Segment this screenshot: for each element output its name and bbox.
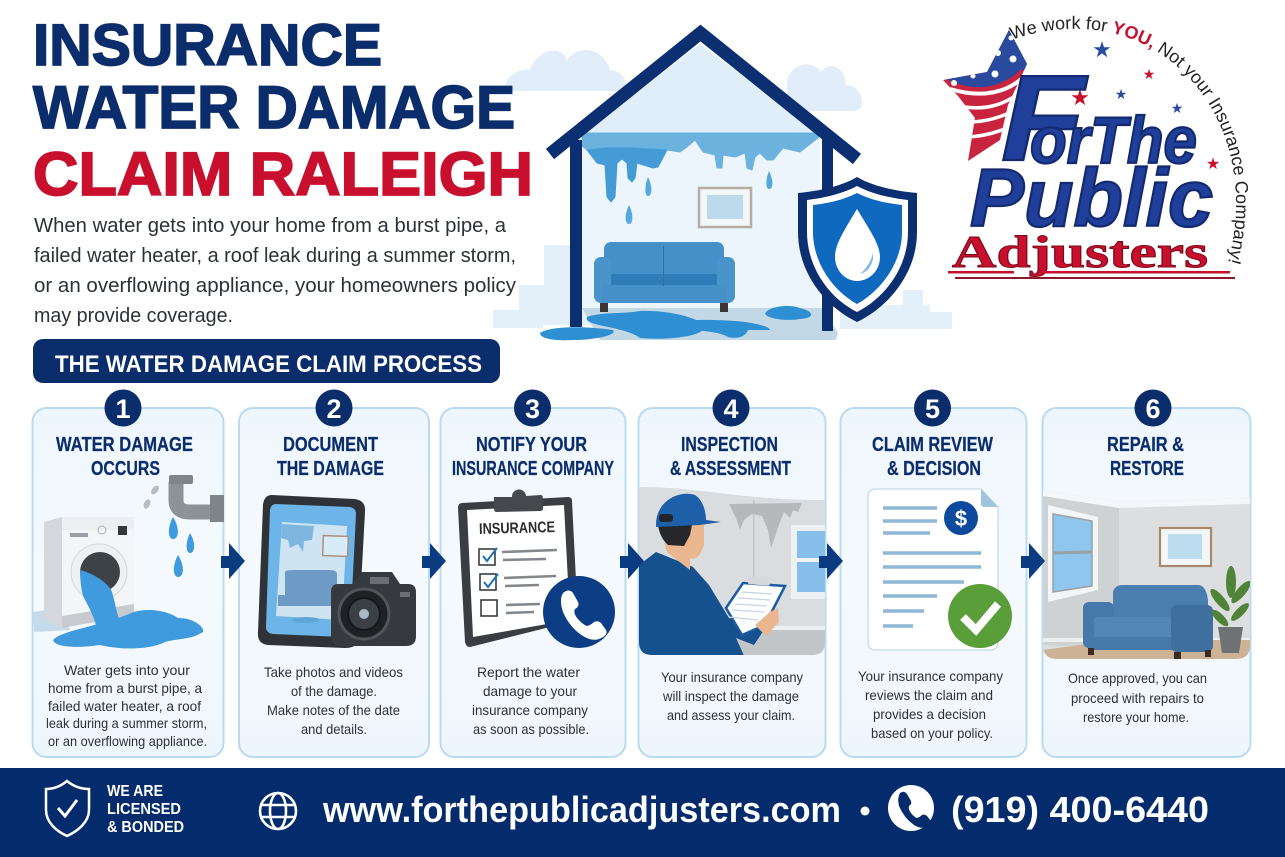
wall picture bbox=[699, 188, 751, 227]
licensed text bbox=[107, 783, 184, 836]
step 5 number bbox=[914, 390, 951, 426]
roof and walls bbox=[550, 33, 857, 331]
step 4 text: will inspect the damage bbox=[662, 688, 799, 704]
process banner: THE WATER DAMAGE CLAIM PROCESS bbox=[55, 351, 482, 378]
step 4 text: and assess your claim. bbox=[667, 707, 795, 723]
logo wordmark: orThe bbox=[1030, 103, 1197, 177]
step 4 text: Your insurance company bbox=[661, 669, 803, 685]
step 6 text: Once approved, you can bbox=[1068, 670, 1207, 686]
title: INSURANCE bbox=[33, 13, 382, 78]
step 4 panel bbox=[638, 390, 827, 757]
website: www.forthepublicadjusters.com bbox=[322, 789, 841, 830]
step 1 text: home from a burst pipe, a bbox=[48, 680, 202, 696]
logo adjusters: Adjusters bbox=[952, 226, 1208, 277]
step 2 panel bbox=[239, 390, 429, 757]
step 4 number: 4 bbox=[723, 394, 739, 424]
inspector cap bbox=[656, 494, 721, 527]
icon: shield with water drop bbox=[798, 177, 917, 322]
step 1 heading bbox=[56, 433, 193, 480]
inspector hand bbox=[755, 608, 779, 636]
logo small stars: ★ bbox=[1070, 85, 1090, 110]
checklist bbox=[479, 548, 557, 616]
step 3 heading: INSURANCE COMPANY bbox=[452, 457, 614, 480]
step 1 panel bbox=[32, 390, 224, 757]
sofa bbox=[594, 242, 735, 312]
step 6 heading: RESTORE bbox=[1110, 457, 1184, 480]
step 1 number bbox=[104, 390, 142, 426]
logo small stars bbox=[1070, 37, 1220, 173]
picture bbox=[1160, 528, 1211, 566]
step 4 heading: & ASSESSMENT bbox=[670, 457, 791, 480]
arrow 2 to 3 bbox=[422, 543, 446, 579]
plant bbox=[1210, 566, 1250, 653]
step 6 heading bbox=[1107, 433, 1184, 480]
step 3 number bbox=[514, 390, 551, 426]
logo small stars: ★ bbox=[1115, 86, 1127, 102]
step 5 panel bbox=[840, 390, 1026, 757]
icon: dollar badge bbox=[944, 501, 978, 535]
step 1 text: leak during a summer storm, bbox=[46, 715, 207, 731]
title bbox=[33, 13, 533, 209]
icon: washing machine with water and burst pipe bbox=[33, 475, 224, 648]
process banner bbox=[33, 339, 500, 383]
step 3 text: insurance company bbox=[472, 702, 588, 718]
step 5 heading bbox=[872, 433, 994, 480]
arrow 5 to 6 bbox=[1021, 543, 1045, 579]
phone number: (919) 400-6440 bbox=[951, 789, 1209, 830]
step 5 text: provides a decision bbox=[873, 706, 986, 722]
title: CLAIM RALEIGH bbox=[33, 141, 533, 209]
step 5 number: 5 bbox=[925, 394, 940, 424]
logo small stars: ★ bbox=[1092, 37, 1112, 62]
icon: globe bbox=[260, 793, 296, 829]
burst pipe bbox=[176, 482, 215, 512]
skyline bbox=[493, 245, 952, 329]
intro paragraph: may provide coverage. bbox=[34, 304, 233, 327]
footer band bbox=[0, 768, 1285, 857]
step 3 heading bbox=[452, 433, 614, 480]
step 3 text bbox=[472, 664, 589, 737]
icon: dollar badge: $ bbox=[955, 506, 967, 531]
step 3 text: damage to your bbox=[483, 683, 577, 699]
window bbox=[791, 525, 827, 599]
step 3 text: Report the water bbox=[477, 664, 580, 680]
separator dot bbox=[860, 806, 870, 816]
arrow 1 to 2 bbox=[221, 543, 245, 579]
icon: phone circle bbox=[543, 576, 615, 648]
step 5 text: reviews the claim and bbox=[865, 687, 993, 703]
intro paragraph: failed water heater, a roof leak during a summer storm, bbox=[34, 244, 516, 267]
falling drops bbox=[626, 171, 772, 224]
logo small stars: ★ bbox=[1171, 100, 1183, 116]
logo wordmark bbox=[970, 50, 1213, 244]
step 3 heading: NOTIFY YOUR bbox=[476, 433, 587, 456]
icon: camera bbox=[331, 572, 416, 646]
icon: insurance clipboard bbox=[458, 489, 615, 648]
step 6 number bbox=[1134, 390, 1172, 426]
inspector jacket bbox=[639, 552, 764, 660]
step 3 text: as soon as possible. bbox=[473, 721, 589, 737]
step 3 panel bbox=[440, 390, 626, 757]
title: WATER DAMAGE bbox=[33, 75, 515, 141]
arrow 3 to 4 bbox=[620, 543, 644, 579]
logo tagline: We work for YOU, Not your Insurance Company! bbox=[1008, 16, 1248, 264]
licensed text: & BONDED bbox=[107, 819, 184, 836]
step 6 heading: REPAIR & bbox=[1107, 433, 1184, 456]
step 2 text: and details. bbox=[301, 721, 367, 737]
step 6 text bbox=[1068, 670, 1207, 725]
intro paragraph: or an overflowing appliance, your homeowners policy bbox=[34, 274, 517, 297]
icon: phone bbox=[888, 785, 934, 831]
illustration: restored room bbox=[1042, 488, 1253, 660]
logo small stars: ★ bbox=[1143, 66, 1155, 82]
step 5 text: Your insurance company bbox=[858, 668, 1003, 684]
step 5 heading: CLAIM REVIEW bbox=[872, 433, 994, 456]
step 2 heading bbox=[277, 433, 384, 480]
intro paragraph bbox=[34, 214, 517, 327]
sofa bbox=[1083, 585, 1213, 660]
step 4 text bbox=[661, 669, 803, 723]
ceiling water bbox=[582, 133, 820, 170]
step 1 heading: WATER DAMAGE bbox=[56, 433, 193, 456]
step 5 heading: & DECISION bbox=[887, 457, 981, 480]
logo star bbox=[943, 30, 1027, 161]
clouds bbox=[504, 50, 862, 111]
step 6 text: proceed with repairs to bbox=[1071, 690, 1204, 706]
step 1 text: or an overflowing appliance. bbox=[48, 733, 207, 749]
arrow 4 to 5 bbox=[819, 543, 843, 579]
icon: tablet with photo of damage bbox=[258, 495, 416, 648]
step 6 number: 6 bbox=[1145, 394, 1161, 424]
icon: licensed shield bbox=[46, 781, 89, 836]
illustration: inspector with clipboard bbox=[638, 486, 827, 660]
hero illustration: flooded house with shield bbox=[493, 33, 952, 340]
step 1 number: 1 bbox=[115, 394, 131, 424]
step 2 text: Take photos and videos bbox=[264, 664, 403, 680]
step 1 text: Water gets into your bbox=[64, 662, 190, 678]
step 2 heading: DOCUMENT bbox=[283, 433, 378, 456]
licensed text: LICENSED bbox=[107, 801, 181, 818]
logo wordmark: F bbox=[1001, 50, 1089, 186]
spilled water bbox=[53, 610, 203, 648]
interior bbox=[582, 44, 820, 325]
intro paragraph: When water gets into your home from a burst pipe, a bbox=[34, 214, 507, 237]
step 2 number: 2 bbox=[326, 394, 342, 424]
window bbox=[1048, 505, 1098, 602]
step 5 text: based on your policy. bbox=[871, 725, 993, 741]
icon: claim document bbox=[868, 489, 1012, 650]
logo wordmark: Public bbox=[970, 153, 1213, 244]
step 2 text bbox=[264, 664, 403, 737]
inspector clipboard bbox=[726, 583, 785, 635]
step 4 heading bbox=[670, 433, 791, 480]
licensed text: WE ARE bbox=[107, 783, 163, 800]
step 6 text: restore your home. bbox=[1083, 709, 1189, 725]
inspector head bbox=[665, 525, 704, 570]
step 2 number bbox=[316, 390, 352, 426]
icon: insurance clipboard: INSURANCE bbox=[479, 519, 555, 538]
logo small stars: ★ bbox=[1206, 156, 1220, 173]
step 1 heading: OCCURS bbox=[91, 457, 160, 480]
step 6 panel bbox=[1042, 390, 1253, 757]
step 3 number: 3 bbox=[525, 394, 540, 424]
icon: green check bbox=[948, 584, 1012, 648]
step 2 heading: THE DAMAGE bbox=[277, 457, 384, 480]
step 2 text: of the damage. bbox=[291, 683, 377, 699]
step 2 text: Make notes of the date bbox=[267, 702, 400, 718]
water drops bbox=[169, 517, 194, 577]
floor puddles bbox=[540, 306, 811, 340]
step 5 text bbox=[858, 668, 1003, 741]
step 4 heading: INSPECTION bbox=[681, 433, 778, 456]
step 1 text: failed water heater, a roof bbox=[48, 698, 201, 714]
step 1 text bbox=[46, 662, 207, 749]
logo: For The Public Adjusters bbox=[943, 16, 1248, 279]
step 4 number bbox=[712, 390, 750, 426]
